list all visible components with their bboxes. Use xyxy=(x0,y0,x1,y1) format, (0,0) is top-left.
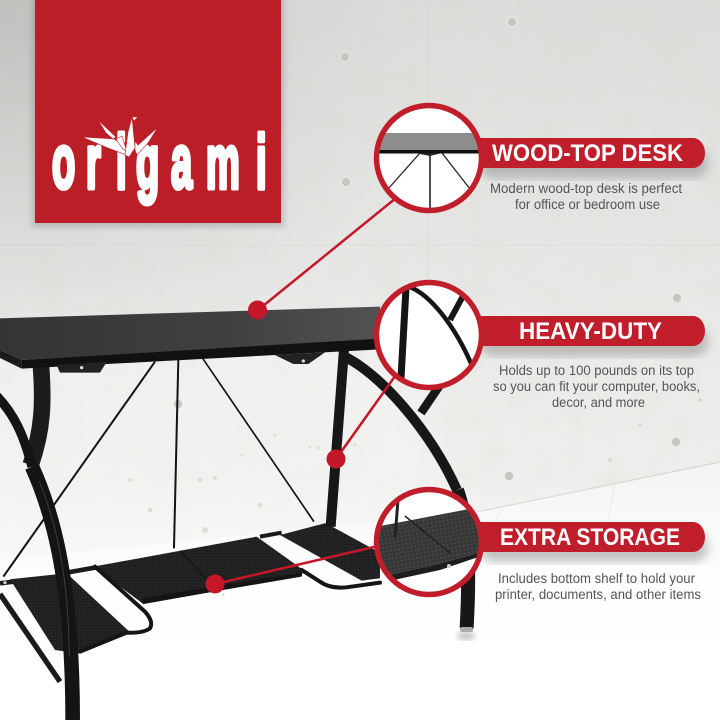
desk brackets xyxy=(57,352,325,373)
desk top xyxy=(0,307,380,360)
right arc and leg xyxy=(331,350,468,628)
banner xyxy=(470,316,705,346)
heading: HEAVY-DUTY xyxy=(519,318,662,345)
leader lines xyxy=(215,198,398,584)
description: Includes bottom shelf to hold your xyxy=(498,571,695,586)
magnifier circle xyxy=(375,106,485,210)
right shelf xyxy=(280,523,380,581)
description: Modern wood-top desk is perfect xyxy=(490,181,682,196)
description: so you can fit your computer, books, xyxy=(493,379,700,394)
description: decor, and more xyxy=(552,395,645,410)
logo wordmark: m xyxy=(206,120,240,204)
magnifier circle xyxy=(376,282,482,388)
logo wordmark: a xyxy=(171,120,193,204)
banner shadow xyxy=(480,326,708,356)
description xyxy=(495,571,701,602)
left arc xyxy=(0,396,73,720)
logo wordmark: i xyxy=(116,120,127,204)
concrete tie holes xyxy=(174,18,682,480)
leader dots xyxy=(206,300,346,594)
magnifier circle xyxy=(375,490,490,594)
center shelf xyxy=(93,537,303,604)
heading: WOOD-TOP DESK xyxy=(492,140,684,167)
callout: wood-top desk xyxy=(375,106,708,212)
foot of right leg xyxy=(457,627,475,640)
logo wordmark: g xyxy=(136,120,159,204)
left shelf xyxy=(10,573,128,653)
callout: heavy-duty xyxy=(376,282,708,410)
banner xyxy=(470,138,705,168)
logo panel xyxy=(32,0,284,227)
banner shadow xyxy=(480,532,708,562)
logo wordmark: o xyxy=(52,120,75,204)
banner xyxy=(470,522,705,552)
description: for office or bedroom use xyxy=(515,197,660,212)
description xyxy=(493,363,700,410)
logo crane icon xyxy=(82,117,158,157)
wall stains xyxy=(128,398,702,533)
cross braces xyxy=(3,358,314,577)
heading: EXTRA STORAGE xyxy=(500,524,680,551)
callout: extra storage xyxy=(375,490,708,602)
logo wordmark: i xyxy=(256,120,267,204)
banner shadow xyxy=(480,148,708,178)
description: Holds up to 100 pounds on its top xyxy=(499,363,694,378)
left shelf frame tubes xyxy=(0,525,380,682)
left leg xyxy=(31,362,42,465)
desk photograph xyxy=(0,307,468,720)
shelf U tubes xyxy=(80,567,380,652)
logo wordmark: r xyxy=(86,120,101,204)
description: printer, documents, and other items xyxy=(495,587,701,602)
description xyxy=(490,181,682,212)
